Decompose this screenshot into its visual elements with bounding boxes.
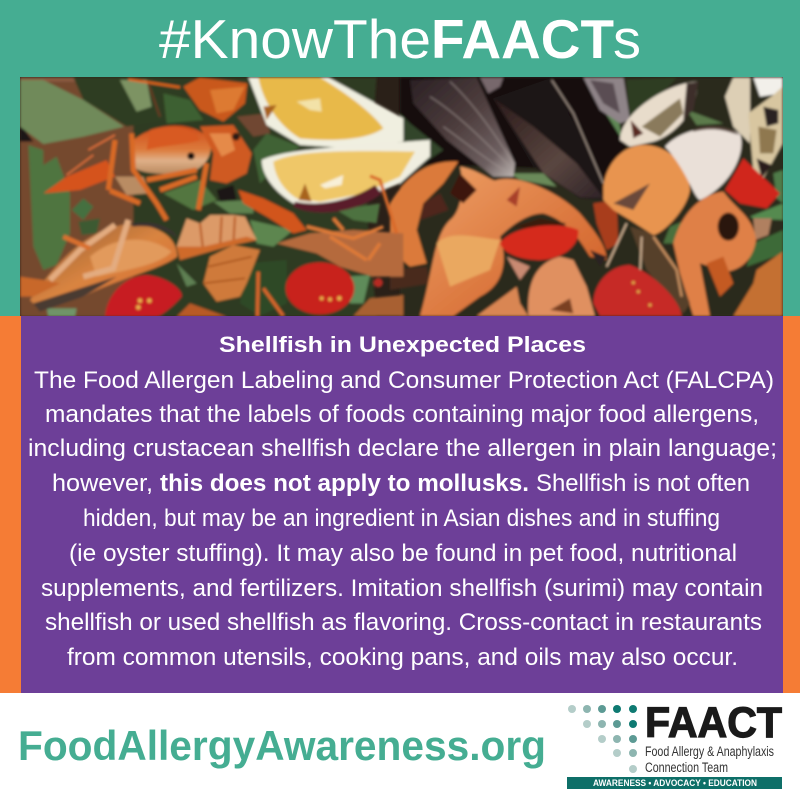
photo: seafood platter: [20, 77, 783, 317]
shrimp right: [673, 192, 756, 316]
tomato right: [725, 158, 780, 208]
bottom crayfish tail: [203, 245, 260, 302]
website link text: FoodAllergyAwareness.org: [18, 722, 546, 769]
tomatoes: [500, 225, 578, 260]
wordmark: FAACT: FAACT: [645, 699, 782, 747]
text block: FALCPA paragraph: (ie oyster stuffing). It may also be found in pet food, nutritional: [69, 540, 737, 567]
text block: FALCPA paragraph: including crustacean shellfish declare the allergen in plain language;: [28, 435, 777, 462]
clams: [620, 82, 697, 147]
icon: dot triangle: [568, 705, 637, 773]
text block: FALCPA paragraph: [28, 367, 777, 671]
title: #KnowThe: [159, 8, 431, 70]
upper crayfish: [183, 77, 247, 122]
orange side band: [0, 316, 800, 693]
lemon wedge two: [262, 140, 430, 210]
text block: FALCPA paragraph: supplements, and fertilizers. Imitation shellfish (surimi) may contain: [41, 575, 763, 602]
tagline: organisation name: Connection Team: [645, 760, 728, 775]
tomatoes: [105, 275, 182, 317]
text block: FALCPA paragraph: mandates that the labels of foods containing major food allergens,: [45, 401, 759, 428]
heading: Shellfish in Unexpected Places: Shellfish in Unexpected Places: [219, 332, 586, 357]
motto bar: AWARENESS • ADVOCACY • EDUCATION: [593, 778, 757, 788]
text block: FALCPA paragraph: shellfish or used shellfish as flavoring. Cross-contact in restaurants: [45, 609, 762, 636]
body copy: [28, 332, 777, 671]
lemon wedge one: [248, 77, 403, 148]
top teal band: [0, 0, 800, 316]
large shrimp: [630, 227, 690, 313]
title: s: [613, 8, 641, 70]
FAACT logo: [567, 699, 782, 789]
text block: FALCPA paragraph: from common utensils, cooking pans, and oils may also occur.: [67, 644, 738, 671]
title: FAACT: [431, 8, 614, 70]
shrimp group left: [390, 161, 458, 267]
tagline: organisation name: [645, 744, 774, 775]
mussels: [410, 77, 515, 177]
right crayfish: [238, 190, 307, 233]
clam shell large: [665, 128, 741, 200]
purple text panel: [21, 316, 783, 693]
lower crayfish: [30, 223, 177, 310]
text block: FALCPA paragraph: this does not apply to mollusks.: [160, 470, 529, 497]
crayfish body: [43, 160, 115, 193]
title: [159, 8, 641, 70]
text block: FALCPA paragraph: hidden, but may be an ingredient in Asian dishes and in stuffing: [83, 505, 720, 532]
text block: FALCPA paragraph: Shellfish is not often: [536, 470, 750, 497]
motto bar: [567, 777, 782, 789]
text block: FALCPA paragraph: however,: [52, 470, 153, 497]
text block: FALCPA paragraph: The Food Allergen Labeling and Consumer Protection Act (FALCPA): [34, 367, 774, 394]
